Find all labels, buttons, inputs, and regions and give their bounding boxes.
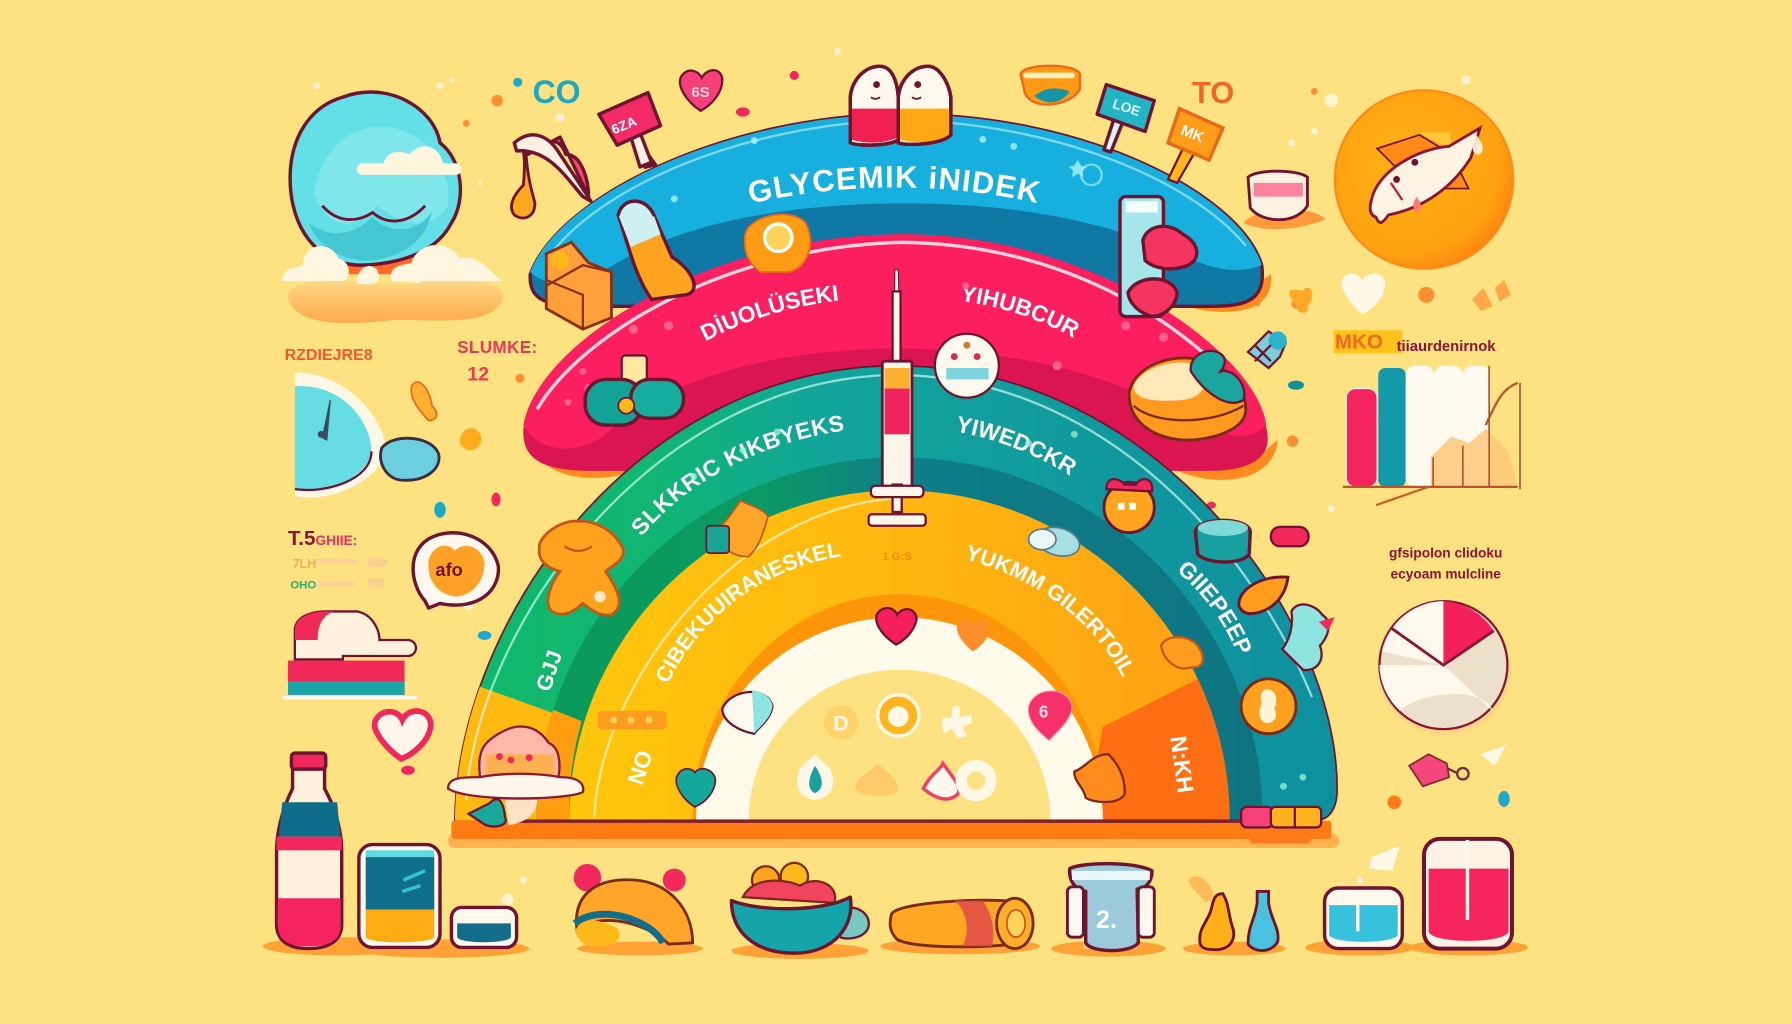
label: number 12: 12 <box>467 364 489 386</box>
icon: pink bread sign spoon <box>512 135 591 218</box>
icon: soda bottle <box>277 753 342 949</box>
icon: tube with cherries <box>1120 197 1197 317</box>
icon: cyan jar <box>1325 888 1402 949</box>
pie chart note: ecyoam mulcline <box>1390 566 1501 581</box>
icon: red pill <box>1271 527 1309 546</box>
icon: white ring <box>961 766 991 795</box>
text: left pink label: DİUOLÜSEKI <box>700 285 838 341</box>
icon: speech bubble with heart <box>413 533 498 608</box>
icon: center D glyph: D <box>833 710 849 735</box>
icon: heart pink center <box>876 608 917 645</box>
yellow arch <box>569 491 1230 820</box>
text: right pink label: YIHUBCUR <box>964 287 1078 338</box>
icon: measuring cup with 2 <box>1067 864 1154 951</box>
icon: faded orange bun <box>855 763 898 796</box>
icon: orange cake piece <box>1074 754 1125 802</box>
icon: short jar <box>451 907 517 947</box>
icon: teal capsule on pink band <box>585 355 683 425</box>
pie chart <box>1378 601 1511 735</box>
icon: teal sign: LOE <box>1111 96 1142 119</box>
icon: rolled pastry <box>890 898 1033 949</box>
icon: orange ring pastry <box>745 214 810 272</box>
bottom shadows <box>263 937 1528 959</box>
icon: blue band bottle <box>618 201 694 299</box>
icon: pink key <box>1409 754 1469 786</box>
icon: blue pill on yellow <box>1029 523 1083 561</box>
text: orange segment label: N:KH <box>1165 734 1199 794</box>
chart heading: tiiaurdenirnok <box>1397 339 1496 355</box>
icon: pink outline heart <box>375 711 431 759</box>
heading: title: GLYCEMIK iNIDEK <box>749 166 1040 203</box>
icon: colored blocks <box>1241 807 1321 843</box>
icon: measuring cup with 2: 2. <box>1096 906 1117 934</box>
icon: pink tag droplet <box>1028 691 1072 741</box>
icon: orange nugget <box>1161 637 1203 668</box>
chart heading: MKO <box>1335 331 1383 354</box>
icon: pink sign: 6ZA <box>609 114 639 137</box>
icon: pink heart <box>680 70 722 111</box>
text: TO glyphs: TO <box>1192 75 1234 110</box>
bar chart <box>1343 366 1520 505</box>
icon: pudding with teal swirl <box>1129 351 1246 440</box>
text: CO glyphs: CO <box>533 74 581 110</box>
icon: cream dial badge <box>935 334 999 398</box>
icon: taco <box>574 864 693 947</box>
text: lower yellow label: NO <box>622 747 658 788</box>
icon: teal sign <box>1097 85 1154 152</box>
icon: small orange spiral <box>460 428 481 450</box>
icon: blue band bread cube <box>546 242 611 329</box>
text: right teal label: YIWEDCKR <box>958 416 1076 476</box>
icon: twin capsules <box>850 66 951 145</box>
icon: tall jar <box>359 845 440 947</box>
text: left yellow label: CIBEKUUIRANESKEL <box>657 543 841 682</box>
text: right yellow label: YUKMM GILERTOIL <box>969 544 1132 677</box>
icon: cream heart <box>1341 273 1385 314</box>
icon: orange star with lock <box>706 501 768 557</box>
icon: pink tag droplet: 6 <box>1039 702 1048 722</box>
icon: half teal droplet <box>722 690 773 734</box>
pink band <box>523 234 1278 480</box>
icon: small orange charm <box>411 382 437 421</box>
icon: clover badge <box>1248 331 1287 368</box>
icon: pink heart: 6S <box>691 85 710 101</box>
icon: big orange coin with fish <box>1335 90 1513 269</box>
icon: orange bowl <box>1021 66 1080 105</box>
icon: pink jar <box>1424 839 1512 949</box>
icon: gingerbread <box>539 521 623 615</box>
label: orange red small heading: RZDIEJRE8 <box>285 347 373 364</box>
icon: syringe <box>869 270 926 526</box>
text: left teal label: SLKKRIC KIKBYEKS <box>632 416 844 534</box>
icon: orange sign <box>1168 109 1223 183</box>
chart heading <box>1334 330 1496 355</box>
label: slumke: SLUMKE: <box>457 337 538 357</box>
icon: two small bottles <box>1189 876 1278 951</box>
icon: pink swirl heart <box>923 763 959 799</box>
icon: teal heart <box>676 769 715 807</box>
icon: orange crumbs <box>1472 280 1511 311</box>
icon: gauge <box>295 373 439 498</box>
blue band: Glycemik Inidek <box>528 114 1272 312</box>
text: green side label: GJJ <box>531 647 567 694</box>
icon: teal drop badge <box>797 754 833 800</box>
teal green arch <box>454 365 1338 821</box>
text: small centre label: 1 G:S <box>882 551 912 563</box>
icon: speech bubble with heart: afo <box>435 559 463 580</box>
icon: orange leaf <box>1239 577 1288 614</box>
label: T.5 chip key: OHO <box>290 580 316 592</box>
text: far right teal label: GIIEPEEP <box>1180 562 1251 652</box>
pie chart note <box>1389 546 1502 581</box>
icon: orange coin <box>1241 679 1296 734</box>
icon: bowl of fruit <box>731 863 869 953</box>
icon: stapler machine <box>282 611 417 699</box>
icon: orange tag strip <box>598 711 666 729</box>
icon: center orange ring <box>878 695 919 736</box>
label: T.5 chip key: T.5GHIIE: <box>288 527 357 550</box>
label: T.5 chip key <box>288 527 386 592</box>
icon: ghost figure <box>1282 604 1335 670</box>
icon: orange center heart <box>957 620 990 651</box>
icon: bear face <box>1104 479 1154 533</box>
icon: pink sign <box>599 93 661 169</box>
pie chart note: gfsipolon clidoku <box>1389 546 1502 561</box>
icon: orange clip <box>1289 288 1312 313</box>
icon: center D glyph <box>824 705 858 739</box>
icon: orange sign: MK <box>1178 123 1206 146</box>
baseline shelf <box>448 819 1339 848</box>
icon: white birds <box>1369 745 1506 871</box>
icon: white flower <box>942 706 971 738</box>
icon: cup with glasses <box>1243 171 1326 229</box>
balloon cloud illustration <box>282 92 503 323</box>
icon: cake on band <box>448 726 583 826</box>
label: T.5 chip key: 7LH <box>293 557 316 571</box>
icon: teal cup <box>1195 520 1250 562</box>
